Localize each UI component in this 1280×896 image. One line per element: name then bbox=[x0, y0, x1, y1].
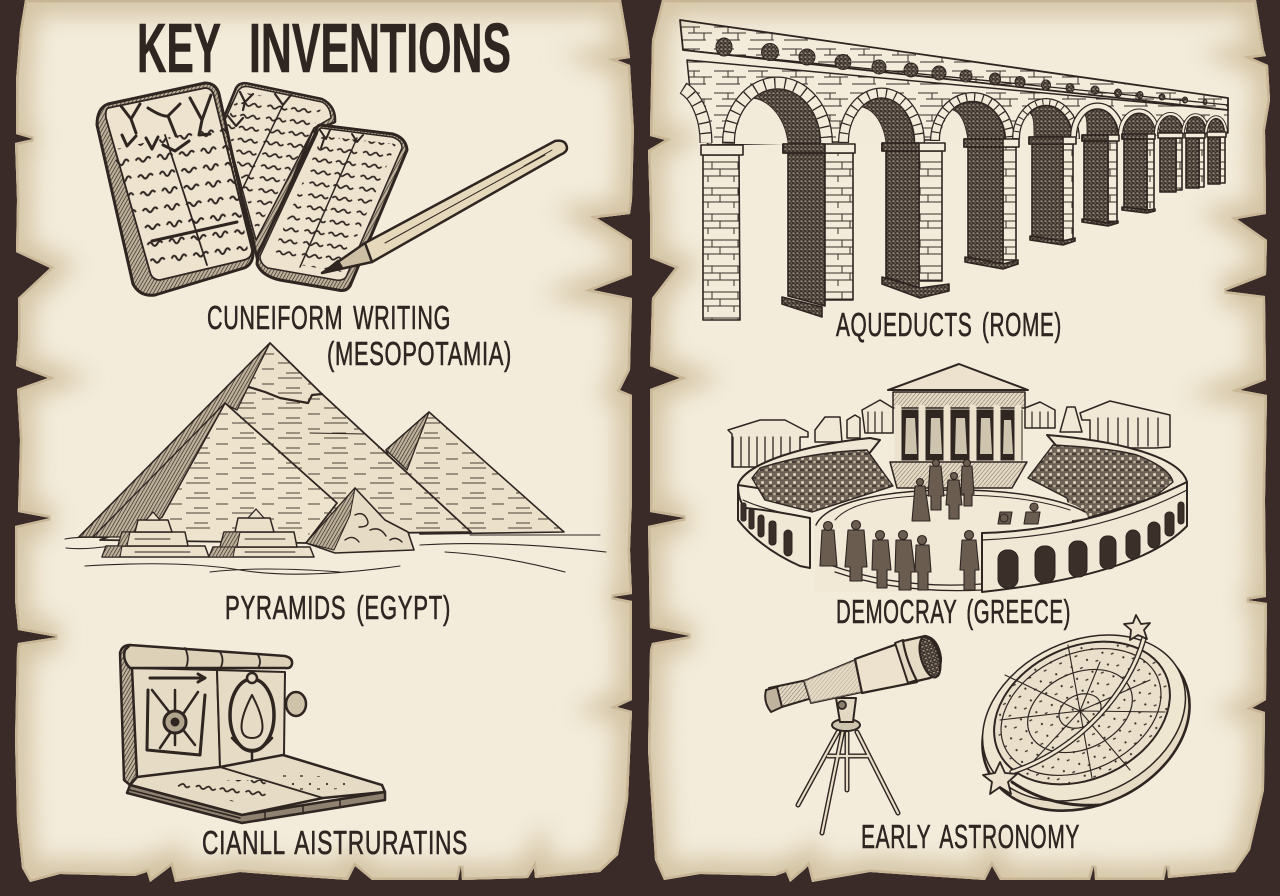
eyepiece bbox=[769, 680, 812, 709]
icon: astrolabe bbox=[954, 603, 1218, 843]
foreground citizens bbox=[820, 503, 1040, 590]
stars bbox=[983, 615, 1150, 794]
emblem bbox=[147, 674, 205, 755]
panel: left parchment bbox=[15, 0, 634, 882]
top roll bbox=[124, 645, 292, 668]
right tablet bbox=[257, 125, 407, 290]
spandrel wall bbox=[687, 60, 1228, 145]
label: democray: DEMOCRAY (GREECE) bbox=[836, 593, 1071, 630]
spine bbox=[120, 645, 137, 785]
label: aqueducts: AQUEDUCTS (ROME) bbox=[836, 306, 1062, 343]
front tablet bbox=[97, 83, 253, 295]
arch openings bbox=[735, 90, 1224, 144]
stepped pyramid two bbox=[209, 509, 314, 557]
stepped pyramid one bbox=[102, 512, 209, 557]
orbit arm bbox=[1012, 638, 1144, 772]
upper deck bbox=[680, 20, 1228, 110]
tripod bbox=[798, 730, 898, 833]
icon: greek theatre bbox=[728, 364, 1187, 592]
arch vaults bbox=[752, 87, 1224, 143]
arch rings bbox=[683, 83, 1226, 143]
rubble pyramid bbox=[306, 488, 414, 553]
right pyramid bbox=[386, 412, 564, 534]
book edge bbox=[127, 785, 385, 823]
back tablet bbox=[222, 83, 335, 264]
seated crowd bbox=[752, 445, 1173, 522]
icon: scroll book bbox=[120, 645, 385, 823]
amphitheatre outer wall back bbox=[738, 435, 1187, 510]
front left wall bbox=[738, 485, 810, 568]
hinge knob bbox=[286, 692, 306, 716]
label: cuneiform writing bbox=[207, 299, 512, 372]
label: cuneiform writing: CUNEIFORM WRITING bbox=[207, 299, 451, 336]
title bbox=[137, 9, 511, 87]
arena floor bbox=[815, 490, 1088, 592]
title: KEY bbox=[137, 9, 221, 87]
icon: telescope bbox=[765, 634, 944, 833]
label: cuneiform writing: (MESOPOTAMIA) bbox=[327, 335, 512, 372]
great pyramid bbox=[79, 343, 471, 537]
middle pyramid bbox=[93, 403, 337, 543]
tube sections bbox=[804, 660, 862, 703]
label: cianll aistruratins: CIANLL AISTRURATINS bbox=[202, 824, 468, 861]
deck windows bbox=[716, 38, 1207, 104]
upright right page bbox=[217, 670, 285, 767]
lower pages bbox=[130, 755, 385, 815]
stylus bbox=[322, 141, 567, 273]
upright left page bbox=[130, 668, 220, 777]
main temple bbox=[888, 364, 1028, 488]
icon: cuneiform tablets and stylus bbox=[97, 83, 567, 295]
title: INVENTIONS bbox=[249, 9, 511, 87]
label: early astronomy: EARLY ASTRONOMY bbox=[861, 818, 1080, 855]
side temples and ruins bbox=[728, 400, 1170, 467]
orators in the centre bbox=[912, 460, 974, 521]
icon: aqueduct bbox=[680, 20, 1228, 320]
icon: pyramids bbox=[65, 343, 606, 574]
aqueduct piers bbox=[701, 132, 1226, 320]
front right wall bbox=[982, 482, 1187, 592]
water drop oval bbox=[230, 673, 274, 760]
ground lines bbox=[65, 535, 606, 574]
label: pyramids: PYRAMIDS (EGYPT) bbox=[225, 589, 451, 626]
panel: right parchment bbox=[648, 0, 1270, 882]
